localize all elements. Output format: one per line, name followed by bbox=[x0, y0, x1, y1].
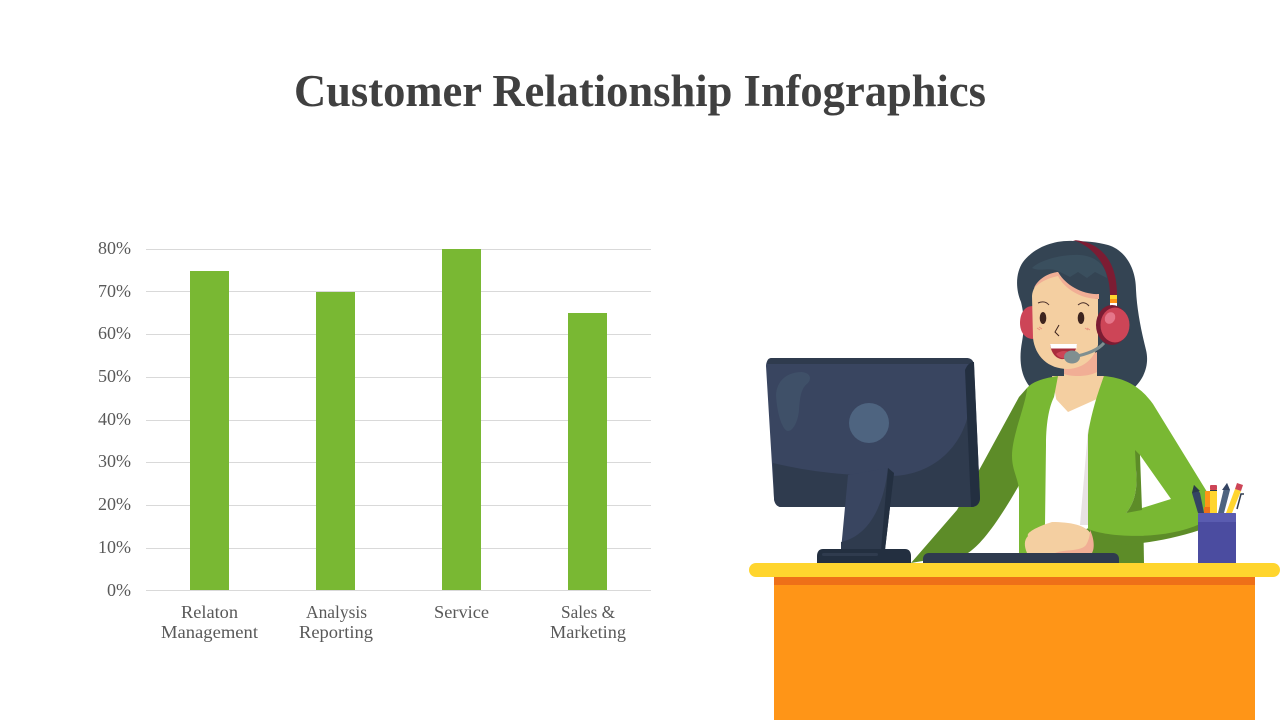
y-axis labels: 40% bbox=[98, 409, 131, 429]
x-axis labels bbox=[161, 602, 626, 642]
desk top bbox=[749, 563, 1280, 577]
face bbox=[1032, 272, 1098, 369]
illustration: customer service agent at desk bbox=[749, 240, 1280, 720]
hand bbox=[1025, 522, 1093, 553]
y-axis labels bbox=[98, 238, 131, 600]
mouth bbox=[1050, 344, 1077, 359]
mount disc bbox=[849, 403, 889, 443]
bars bbox=[190, 249, 607, 590]
monitor right edge bbox=[965, 362, 980, 507]
y-axis labels: 30% bbox=[98, 451, 131, 471]
fringe shadow bbox=[1034, 272, 1099, 299]
arm gap bbox=[1126, 455, 1171, 513]
cardigan left front bbox=[1012, 376, 1058, 553]
x-axis labels: Reporting bbox=[299, 622, 373, 642]
lower sleeve shadow bbox=[1084, 505, 1144, 563]
x-axis labels: Management bbox=[161, 622, 258, 642]
x-axis labels: Marketing bbox=[550, 622, 626, 642]
monitor lower shade bbox=[773, 415, 971, 507]
desk body bbox=[774, 585, 1255, 720]
bar chart bbox=[98, 238, 651, 642]
y-axis labels: 70% bbox=[98, 281, 131, 301]
hair highlight bbox=[1032, 255, 1107, 278]
x-axis labels: Service bbox=[434, 602, 489, 622]
pencils in cup bbox=[1192, 483, 1244, 513]
keyboard bbox=[923, 553, 1119, 563]
left ear cup bbox=[1020, 306, 1033, 339]
nose bbox=[1055, 325, 1059, 336]
x-axis labels: Relaton bbox=[181, 602, 238, 622]
monitor bbox=[766, 358, 980, 563]
pencil cup bbox=[1198, 513, 1236, 563]
neck bbox=[1052, 360, 1104, 420]
monitor top edge bbox=[767, 358, 974, 364]
y-axis labels: 0% bbox=[107, 580, 131, 600]
desk shadow band bbox=[774, 577, 1255, 585]
white shirt bbox=[1045, 397, 1097, 525]
hair bbox=[1017, 241, 1147, 387]
stand bbox=[841, 468, 888, 550]
title: Customer Relationship Infographics bbox=[294, 66, 986, 116]
y-axis labels: 10% bbox=[98, 537, 131, 557]
y-axis labels: 60% bbox=[98, 323, 131, 343]
eyebrows bbox=[1038, 302, 1089, 306]
x-axis labels: Sales & bbox=[561, 602, 615, 622]
y-axis labels: 50% bbox=[98, 366, 131, 386]
y-axis labels: 20% bbox=[98, 494, 131, 514]
x-axis labels: Analysis bbox=[306, 602, 367, 622]
eyes bbox=[1040, 312, 1046, 324]
y-axis labels: 80% bbox=[98, 238, 131, 258]
cardigan right front and arm bbox=[1088, 376, 1212, 537]
stand base bbox=[817, 549, 911, 563]
far arm bbox=[911, 388, 1040, 563]
headset bbox=[1064, 240, 1130, 364]
cheeks bbox=[1037, 327, 1090, 330]
highlight blob bbox=[776, 372, 810, 431]
